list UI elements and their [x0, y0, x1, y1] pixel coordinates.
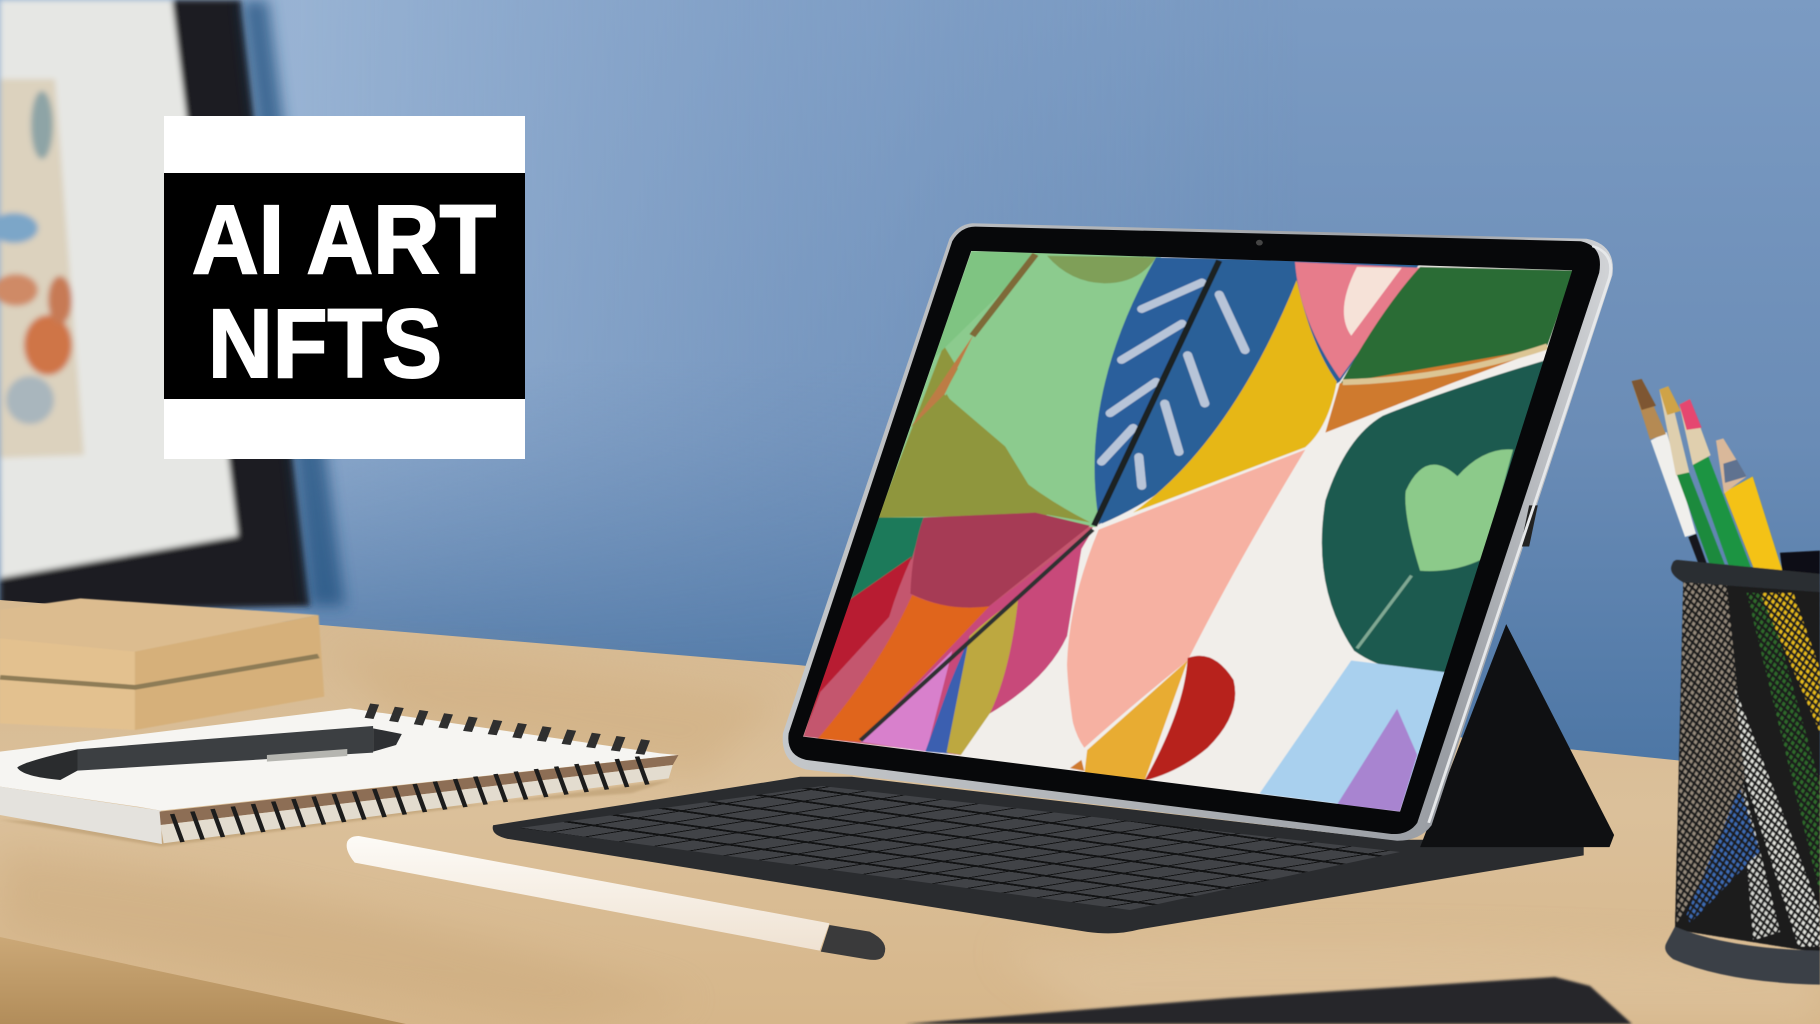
wooden block	[0, 598, 324, 730]
silver edge highlight	[1429, 246, 1611, 823]
front green pencil	[1693, 457, 1753, 574]
dark object at bottom edge	[905, 977, 1632, 1024]
white pencil	[1651, 432, 1696, 537]
notebook back spiral	[367, 711, 660, 749]
tablet	[783, 223, 1613, 841]
keyboard keys	[520, 786, 1400, 910]
notebook front spiral	[175, 768, 660, 828]
white stylus	[347, 836, 885, 960]
holder mesh body	[1675, 580, 1820, 953]
label black band	[164, 173, 525, 399]
tablet stand	[1420, 624, 1614, 847]
yellow pencil	[1724, 476, 1784, 576]
side button	[1521, 505, 1538, 547]
framed picture on wall	[0, 0, 310, 612]
background: blue wall	[0, 0, 1820, 800]
stylus cap	[821, 925, 885, 960]
holder interior back	[1780, 551, 1820, 580]
pencil holder with pencils	[1632, 379, 1820, 985]
central vein lines	[1094, 261, 1219, 526]
title text line 2: NFTS	[208, 289, 442, 398]
holder rim	[1671, 560, 1820, 592]
camera	[1256, 240, 1263, 246]
tablet body	[783, 223, 1613, 841]
keyboard case	[493, 777, 1584, 933]
desk surface	[0, 600, 1820, 1024]
underlays closing gaps between shapes	[878, 251, 1162, 527]
screen artwork	[789, 244, 1592, 825]
frame shadow on wall	[241, 0, 345, 606]
tablet bezel	[788, 227, 1600, 834]
holder base	[1665, 927, 1820, 985]
back green pencil	[1677, 471, 1727, 570]
title text line 1: AI ART	[192, 185, 496, 294]
black pen on notebook	[17, 726, 402, 780]
spiral notebook	[0, 708, 678, 847]
label: AI Art NFTs	[164, 116, 525, 459]
